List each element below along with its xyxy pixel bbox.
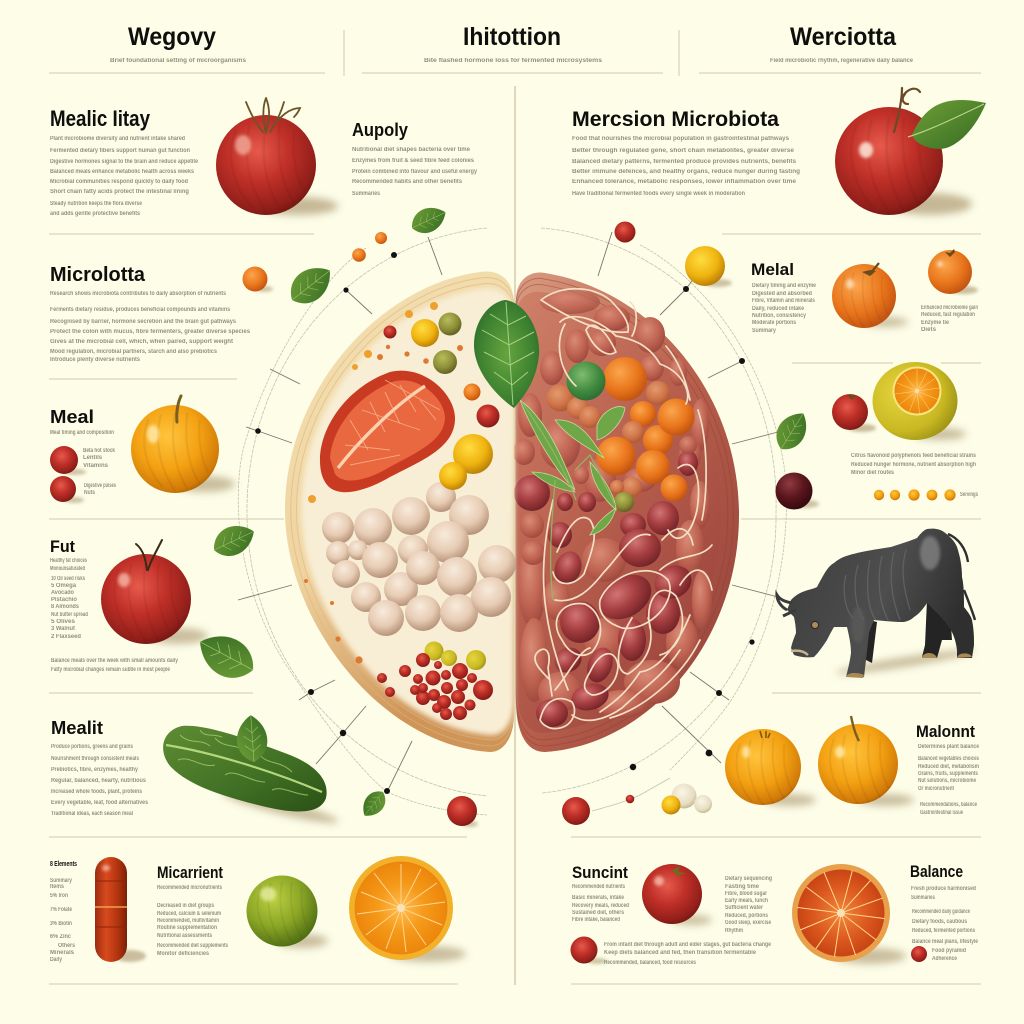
text block: Monitor deficiencies [157,951,210,957]
text block: Reduced, calcium & selenium [157,911,221,917]
icon: small fruits row [562,784,712,825]
text block: Enhanced tolerance, metabolic responses, lower inflammation over time [572,179,797,185]
green sprig [520,400,625,535]
icon: red berry [911,946,927,962]
text block: Pistachio [51,597,77,603]
text block: Diets [921,327,937,333]
subtitle: Brief foundational setting of microorganisms [110,58,247,64]
icon: blood orange slice [787,859,906,967]
panel: capsule and Micarrient [50,856,466,963]
text block: Nutrition, consistency [752,313,807,319]
text block: Better through regulated gene, short chain metabolites, greater diverse [572,148,795,154]
section dividers [49,234,981,984]
icon: golden dots [874,489,956,501]
heading: Melal [751,260,794,279]
panel: Microlotta [50,264,273,363]
text block [851,453,977,476]
text block: Digestive pulses [84,483,116,489]
text block: Summary [50,878,73,884]
text block: Mood regulation, microbial partners, starch and also prebiotics [50,349,218,355]
beans [322,482,516,636]
text block: Reduced diet, metabolism [918,764,979,770]
title: Ihitottion [463,23,561,51]
text block: Increased whole foods, plant, proteins [51,789,143,795]
icon: leaf [191,625,262,687]
membrane strands [535,289,712,729]
subtitle: Field microbiotic rhythm, regenerative daily balance [770,58,914,64]
text block: Dietary sequencing [725,876,772,882]
text block: Basic minerals, intake [572,895,625,901]
decorative orbit fruits and leaves [191,201,819,827]
icon: leaf [407,201,450,239]
text block: Adherence [932,956,958,962]
text block: Routine supplementation [157,925,217,931]
heading: Aupoly [352,120,408,140]
heading: Mealic Iitay [50,106,151,131]
text block: Fibre intake, balanced [572,917,620,923]
text block [572,884,629,923]
heading: Micarrient [157,863,223,882]
brain diagram: gut and food halves [285,272,739,752]
text block: Recommended daily guidance [912,909,970,915]
text label: Servings [960,492,978,498]
icon: red apple [216,98,338,215]
text block: Lentils [83,455,103,461]
text block: Balanced dietary patterns, fermented produce provides nutrients, benefits [572,159,797,165]
heading: Mercsion Microbiota [572,108,779,131]
text block: Recommendations, balance [920,802,977,808]
heading: Balance [910,862,963,881]
icon: dark cherry [776,472,819,510]
icon: golden orange [725,729,816,806]
text block: Have traditional fermented foods every single week in moderation [572,191,745,197]
text block: Protect the colon with mucus, fibre fermenters, greater diverse species [50,329,251,335]
central divider [514,86,516,985]
text block: Early meals, lunch [725,898,768,904]
icon: small leaf [357,786,391,822]
text block: Enzymes from fruit & seed fibre feed colonies [352,158,475,164]
text block: Recognised by barrier, hormone secretion and the brain gut pathways [50,319,237,325]
text block: Microbial communities respond quickly to daily food [50,179,188,185]
text block: and adds gentle protective benefits [50,211,141,217]
text block [51,744,149,817]
text block: 5% Iron [50,893,68,899]
text block: Reduced, fermented portions [912,928,976,934]
subtitle: Bite flashed hormone loss for fermented microsystems [424,58,603,64]
icon: leaf [208,518,260,563]
text block [50,291,251,363]
text block: Minor diet routes [851,470,895,476]
flat base lobes [518,290,712,718]
text block: Better immune defences, and healthy organs, reduce hunger during fasting [572,169,800,175]
text block: Fibre, blood sugar [725,891,768,897]
panel: lemon and citrus [832,362,978,501]
panel: Suncint [570,863,772,966]
text block: Recommended nutrients [572,884,625,890]
header: Ihitottion [424,23,603,64]
text block [725,876,772,934]
text block [604,942,772,966]
text block: Healthy fat choices [50,558,87,564]
heading: Microlotta [50,264,146,286]
text block: Balanced meals enhance metabolic health across weeks [50,169,195,175]
heading: Fut [50,537,75,556]
panel: Mealic Iitay [50,98,338,217]
text block: Enhanced microbiome gain [921,305,978,311]
text block: Food that nourishes the microbial population in gastrointestinal pathways [572,136,790,142]
steak [320,371,455,492]
text block: Daily, reduced intake [752,306,805,312]
text block: From infant diet through adult and elder stages, gut bacteria change [604,942,772,948]
text block [157,885,228,957]
text block: Plant microbiome diversity and nutrient intake shared [50,136,185,142]
title: Werciotta [790,23,897,51]
text block: Fibre, Vitamin and minerals [752,298,816,304]
icon: red fruit [832,394,876,432]
icon: grazing bull [777,529,975,678]
text block: Beta hot stock [83,448,116,454]
left half: food [285,272,516,752]
text block: 8 Almonds [51,604,80,610]
text block: Keep diets balanced and fed, then transition fermentable [604,950,757,956]
icon: apple with leaf [835,88,986,215]
heading: Meal [50,407,94,427]
icon: orange fruit small [928,249,978,294]
icon: red berry [614,222,636,242]
text block: Recommended habits and other benefits [352,179,463,185]
text block: 2 Flaxseed [51,634,81,640]
text block [352,147,478,197]
text block: Every vegetable, leaf, food alternatives [51,800,149,806]
text block: Recommended, balanced, food resources [604,960,697,966]
text block: Avocado [51,590,74,596]
text block: Determines plant balance [918,744,980,750]
title: Wegovy [128,23,216,51]
text block: 8 Elements [50,861,77,868]
icon: golden apple [131,396,235,493]
text block: Others [58,943,76,949]
panel: Mealit [51,714,340,828]
panel: Mercsion Microbiota [572,88,986,215]
icon: green lime [246,876,328,948]
text block [918,744,980,816]
text block: 6% Zinc [50,934,72,940]
text block: Minerals [50,950,75,956]
text block: Digestive hormones signal to the brain and reduce appetite [50,159,199,165]
text block: Ferments dietary residue, produces beneficial compounds and vitamins [50,307,231,313]
text block: Summaries [352,191,381,197]
text block: Short chain fatty acids protect the intestinal lining [50,189,189,195]
heading: Suncint [572,863,628,882]
icon: cucumber [163,714,340,828]
text block [50,861,77,963]
text block: Nut solutions, microbiome [918,778,977,784]
icon: tomato [642,864,712,925]
seeds and berries [304,302,500,664]
text block: Balanced vegetables choices [918,756,979,762]
panel: Malonnt [725,716,980,816]
icon: central leaf [474,300,539,408]
text block: Regular, balanced, hearty, nutritious [51,778,147,784]
text block: Fatty microbial changes remain subtle in most people [51,667,171,673]
text block: Recommended, multivitamin [157,918,219,924]
icon: red berry [50,476,84,503]
text block: Digested and absorbed [752,291,812,297]
text block: Prebiotics, fibre, enzymes, healthy [51,767,139,773]
heading: Mealit [51,718,103,738]
text block: Citrus flavonoid polyphenols feed beneficial strains [851,453,977,459]
text block: Gastrointestinal issue [920,810,963,816]
text block: Daily [50,957,63,963]
text block: Nut butter spread [51,612,88,618]
icon: yellow plum [685,246,732,287]
text block: Sufficient water [725,905,764,911]
text block: 7% Folate [50,907,73,913]
text block [83,448,116,496]
text block: Recommended micronutrients [157,885,222,891]
icon: cut lemon [872,362,966,440]
text block: Nourishment through consistent meals [51,756,140,762]
text block: 5 Olives [51,619,76,625]
icon: leaf [282,258,339,312]
panel: Fut [50,537,208,673]
text block: Protein combined into flavour and useful energy [352,169,478,175]
icon: capsule [95,857,146,962]
text block: Research shows microbiota contributes to daily absorption of nutrients [50,291,227,297]
right half: gut [513,272,739,752]
panel: Balance [787,859,979,967]
text block [752,283,817,334]
text block: Steady nutrition keeps the flora diverse [50,201,143,207]
text block: Gives at the microbial cell, which, when paired, support weight [50,339,233,345]
text block: Nutritional diet shapes bacteria over time [352,147,471,153]
text block: 10 Oil seed risks [51,576,85,582]
text block: Balance meal plans, lifestyle [912,939,979,945]
text block [911,886,979,962]
icon: red berry [570,936,607,964]
icon: orange berries [352,232,387,262]
text block: Nutritional assessments [157,933,213,939]
text block: Nuts [84,490,96,496]
header: Wegovy [110,23,247,64]
text block [921,305,978,333]
text block: Summaries [911,895,935,901]
panel: Meal [50,396,235,503]
text block: Food pyramid [932,948,966,954]
text block: Sustained diet, others [572,910,625,916]
gut lobes [513,436,698,727]
text block: Fermented dietary fibers support human gut function [50,148,190,154]
icon: orange berry [242,266,273,292]
heading: Malonnt [916,722,975,741]
text block: Good sleep, exercise [725,920,772,926]
text block: Moderate portions [752,320,797,326]
text block: Meal timing and composition [50,430,114,436]
text block: Recovery meals, reduced [572,903,629,909]
text block: Summary [752,328,777,334]
text block: Dietary foods, cautious [912,919,968,925]
text block: Monounsaturated [50,566,85,572]
icon: golden orange with stem [818,716,914,806]
text block: Balance meals over the week with small amounts daily [51,658,179,664]
text block: Items [50,884,65,890]
header: Werciotta [770,23,914,64]
orange nodules [546,357,694,502]
text block: Introduce plenty diverse nutrients [50,357,141,363]
text block: Produce portions, greens and grains [51,744,134,750]
icon: red berry [447,796,478,827]
text block [572,136,800,197]
icon: red berry [50,446,86,475]
text block [50,136,199,217]
text block: Reduced, fast regulation [921,312,975,318]
text block: Or micronutrient [918,786,954,792]
red seed cluster [377,642,493,720]
text block: 3% Biotin [50,921,72,927]
text block: Traditional ideas, each season meal [51,811,133,817]
icon: orange fruit [832,263,908,328]
text block: Grains, fruits, supplements [918,771,979,777]
text block: Recommended diet supplements [157,943,228,949]
panel: Aupoly [352,120,478,197]
panel: Melal [751,249,978,334]
text block: Rhythm [725,928,743,934]
icon: orange slice [349,856,466,962]
text block: Dietary timing and enzyme [752,283,817,289]
icon: leaf [769,406,814,456]
text block: 3 Walnut [51,626,75,632]
icon: red apple [101,540,208,644]
text block: 5 Omega [51,583,77,589]
text block: Vitamins [83,463,109,469]
chart: connector arcs [238,228,787,815]
text block: Reduced hunger hormone, nutrient absorption high [851,462,976,468]
text block: Enzyme tie [921,320,950,326]
text block: Fresh produce harmonised [911,886,976,892]
text block: Fasting time [725,884,760,890]
text block: Decreased in diet groups [157,903,215,909]
text block: Reduced, portions [725,913,769,919]
text block [50,558,179,673]
